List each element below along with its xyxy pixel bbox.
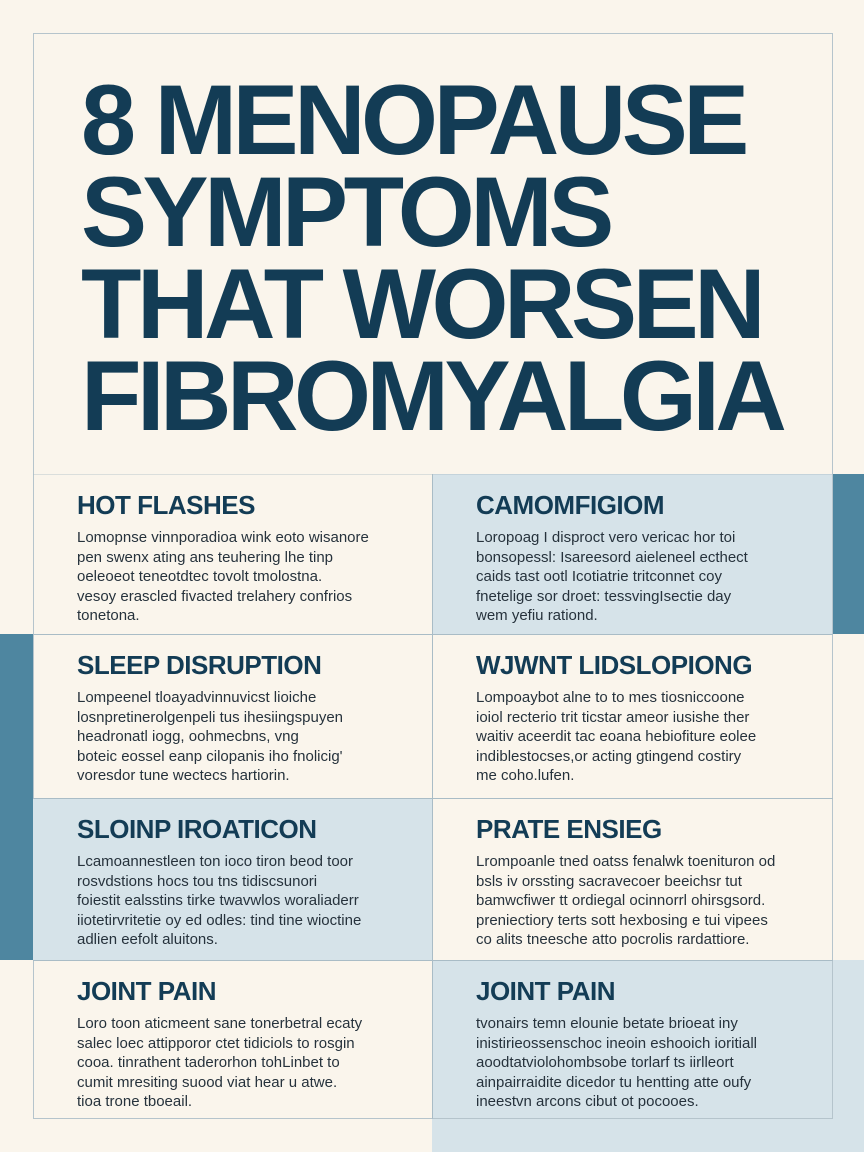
panel: camomfigiom: bonsopessl: Isareesord aieleneel ecthect [476,548,748,566]
panel: sleep disruption: losnpretinerolgenpeli tus ihesiingspuyen [77,708,343,726]
panel: sleep disruption [77,650,343,784]
panel: joint pain left: cumit mresiting suood viat hear u atwe. [77,1074,337,1090]
panel: sloinp iroaticon [33,798,432,960]
panel: sleep disruption: headronatl iogg, oohmecbns, vng [77,728,299,745]
panel: sloinp iroaticon: Lcamoannestleen ton ioco tiron beod toor [77,853,353,870]
panel: hot flashes: tonetona. [77,607,140,624]
panel: joint pain left: tioa trone tboeail. [77,1093,192,1110]
panel: camomfigiom: wem yefiu rationd. [476,607,598,624]
panel: sloinp iroaticon: foiestit ealsstins tirke twavwlos woraliaderr [77,892,359,909]
panel: joint pain left: Loro toon aticmeent sane tonerbetral ecaty [77,1015,362,1032]
panel: camomfigiom: fnetelige sor droet: tessvingIsectie day [476,588,731,604]
grid lines [432,474,433,1119]
title: 8 MENOPAUSE [81,64,745,175]
panel: sleep disruption: voresdor tune wectecs hartiorin. [77,767,290,784]
panel: hot flashes: vesoy erascled fivacted trelahery confrios [77,588,352,604]
title: FIBROMYALGIA [81,340,782,451]
panel: wjwnt lidsloping: WJWNT LIDSLOPIONG [476,650,752,680]
panel: joint pain right: inistirieossenschoc ineoin eshooich ioritiall [476,1034,757,1052]
panel: joint pain right: tvonairs temn elounie betate brioeat iny [476,1015,738,1032]
title: THAT WORSEN [81,248,761,359]
panel: sleep disruption: boteic eossel eanp cilopanis iho fnolicig' [77,748,343,764]
panel: wjwnt lidsloping: ioiol recterio trit ticstar ameor iusishe ther [476,708,749,726]
panel: camomfigiom: Loropoag I disproct vero vericac hor toi [476,529,735,546]
panel: hot flashes [77,490,369,624]
panel: camomfigiom: CAMOMFIGIOM [476,490,664,520]
panel: joint pain left: salec loec attipporor ctet tidiciols to rosgin [77,1034,355,1052]
panel: hot flashes: HOT FLASHES [77,490,255,520]
panel: joint pain left [77,976,362,1110]
title [81,64,784,451]
panel: joint pain right: ainpairraidite dicedor tu hentting atte oufy [476,1074,751,1090]
panel: joint pain right: ineestvn arcons cibut ot pocooes. [476,1093,699,1110]
panel: wjwnt lidsloping: Lompoaybot alne to to mes tiosniccoone [476,689,744,706]
panel: prate ensieg: PRATE ENSIEG [476,814,662,844]
panel: prate ensieg: bamwcfiwer tt ordiegal ocinnorrl ohirsgsord. [476,892,765,909]
panel: joint pain right: JOINT PAIN [476,976,615,1006]
panel: sloinp iroaticon: SLOINP IROATICON [77,814,316,844]
panel: wjwnt lidsloping: me coho.lufen. [476,767,574,784]
panel: hot flashes: oeleoeot teneotdtec tovolt tmolostna. [77,568,322,585]
panel: sloinp iroaticon: rosvdstions hocs tou tns tidiscsunori [77,872,317,890]
panel: joint pain right: aoodtatviolohombsobe torlarf ts iirlleort [476,1054,734,1071]
panel: prate ensieg: preniectiory terts sott hexbosing e tui vipees [476,912,768,928]
title: SYMPTOMS [81,156,610,267]
panel: hot flashes: pen swenx ating ans teuhering lhe tinp [77,548,333,566]
panel: prate ensieg [476,814,775,948]
panel: sloinp iroaticon: adlien eefolt aluitons. [77,931,218,948]
panel: joint pain left: JOINT PAIN [77,976,216,1006]
panel: joint pain right [476,976,757,1110]
panel: camomfigiom [432,474,832,634]
panel: sleep disruption: SLEEP DISRUPTION [77,650,321,680]
panel: wjwnt lidsloping [476,650,756,784]
panel: camomfigiom: caids tast ootl Icotiatrie tritconnet coy [476,568,722,585]
panel: prate ensieg: bsls iv orssting sacravecoer beeichsr tut [476,872,742,890]
panel: prate ensieg: Lrompoanle tned oatss fenalwk toenituron od [476,853,775,870]
panel: prate ensieg: co alits tneesche atto pocrolis rardattiore. [476,931,749,948]
background blocks [832,474,864,634]
panel: wjwnt lidsloping: waitiv aceerdit tac eoana hebiofiture eolee [476,728,756,745]
panel: hot flashes: Lomopnse vinnporadioa wink eoto wisanore [77,529,369,546]
panel: wjwnt lidsloping: indiblestocses,or acting gtingend costiry [476,748,741,764]
panel: sloinp iroaticon: iiotetirvritetie oy ed odles: tind tine wioctine [77,912,361,928]
panel: sleep disruption: Lompeenel tloayadvinnuvicst lioiche [77,689,316,706]
panel: joint pain left: cooa. tinrathent taderorhon tohLinbet to [77,1054,340,1071]
